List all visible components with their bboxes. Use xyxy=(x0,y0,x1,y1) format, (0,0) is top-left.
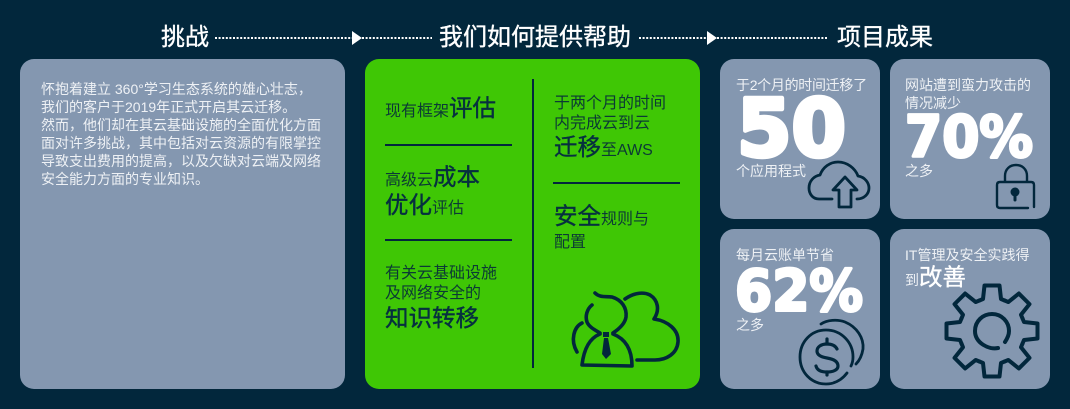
item: framework assessment: 现有框架评估 xyxy=(385,95,496,121)
item: migration to AWS: 内完成云到云 xyxy=(554,115,650,132)
caption: IT management and security practices improved: 到改善 xyxy=(905,264,966,290)
item: migration to AWS: 于两个月的时间 xyxy=(554,95,666,112)
item: cost optimisation: 优化评估 xyxy=(385,192,464,218)
caption: brute-force attacks reduced: 情况减少 xyxy=(905,95,961,111)
icon: padlock xyxy=(996,164,1036,210)
number: 70%: 70% xyxy=(905,104,1033,170)
item: cost optimisation: 高级云成本 xyxy=(385,164,480,190)
caption: brute-force attacks reduced: 网站遭到蛮力攻击的 xyxy=(905,77,1031,93)
panel: result 50 applications xyxy=(720,59,880,219)
caption: or more: 之多 xyxy=(736,317,764,333)
text block: challenge description: 导致支出费用的提高，以及欠缺对云端及网络 xyxy=(41,153,321,169)
panel: result monthly bill savings 62% xyxy=(720,229,880,389)
item: knowledge transfer xyxy=(385,264,497,331)
number: 62%: 62% xyxy=(735,258,863,324)
icon: businessperson with cloud xyxy=(572,291,680,368)
item: security rules: 配置 xyxy=(554,234,586,251)
icon: cloud upload xyxy=(808,160,870,208)
item: knowledge transfer: 有关云基础设施 xyxy=(385,265,497,282)
item: cost optimisation xyxy=(385,164,480,218)
item: migration to AWS xyxy=(554,94,666,160)
caption: IT management and security practices improved: IT管理及安全实践得 xyxy=(905,247,1029,263)
text block: challenge description: 面对许多挑战，其中包括对云资源的有限掌控 xyxy=(41,135,321,151)
text block: challenge description: 怀抱着建立 360°学习生态系统的雄心壮志， xyxy=(41,81,312,97)
item: knowledge transfer: 知识转移 xyxy=(385,305,479,331)
caption: migrated in two months: 于2个月的时间迁移了 xyxy=(736,77,867,93)
rule: right column divider xyxy=(553,182,680,184)
text block: challenge description: 安全能力方面的专业知识。 xyxy=(41,171,209,187)
arrow: challenge to help and help to results xyxy=(215,31,827,45)
rule: vertical column divider xyxy=(532,79,534,368)
rule: left column divider 2 xyxy=(385,239,512,241)
panel: result IT practices improved xyxy=(890,229,1050,389)
heading: how we help: 我们如何提供帮助 xyxy=(439,24,631,51)
caption: applications: 个应用程式 xyxy=(736,163,806,179)
caption: or more: 之多 xyxy=(905,163,933,179)
text block: challenge description: 然而，他们却在其云基础设施的全面优化方面 xyxy=(41,117,321,133)
text block: challenge description xyxy=(41,81,321,187)
panel: how we help xyxy=(365,59,700,389)
heading: challenge: 挑战 xyxy=(161,24,209,51)
text block: challenge description: 我们的客户于2019年正式开启其云迁移。 xyxy=(41,99,296,115)
heading: project results: 项目成果 xyxy=(837,24,933,51)
number: 50: 50 xyxy=(737,83,846,175)
caption: brute-force attacks reduced xyxy=(905,77,1031,111)
panel: challenge xyxy=(20,59,345,389)
caption: IT management and security practices improved xyxy=(905,247,1029,290)
icon: dollar coins xyxy=(798,318,864,386)
caption: monthly cloud bill savings: 每月云账单节省 xyxy=(736,247,834,263)
rule: left column divider 1 xyxy=(385,144,512,146)
item: security rules: 安全规则与 xyxy=(554,203,649,229)
item: migration to AWS: 迁移至AWS xyxy=(554,134,653,160)
icon: gear xyxy=(944,284,1040,378)
item: knowledge transfer: 及网络安全的 xyxy=(385,285,481,302)
panel: result brute-force attacks down 70% xyxy=(890,59,1050,219)
item: security rules xyxy=(554,203,649,251)
